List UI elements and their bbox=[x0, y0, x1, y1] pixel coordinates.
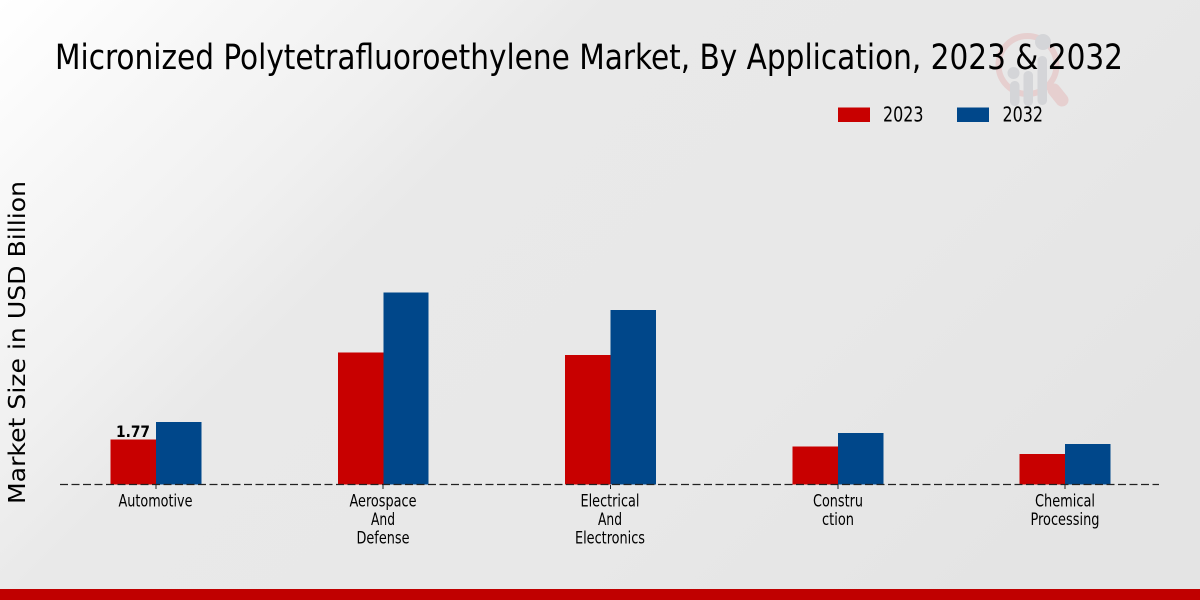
category: Construction: Constru bbox=[813, 492, 863, 510]
legend label: 2023: 2023 bbox=[883, 102, 924, 126]
category: Aerospace And Defense: Defense bbox=[356, 528, 410, 548]
category: Electrical And Electronics: Electronics bbox=[575, 528, 645, 548]
category: Aerospace And Defense: Aerospace bbox=[350, 492, 416, 510]
legend bbox=[838, 102, 1043, 126]
category: Aerospace And Defense: And bbox=[371, 510, 395, 529]
y-axis label: Market Size in USD Billion bbox=[5, 181, 31, 504]
category: Electrical And Electronics bbox=[575, 492, 645, 548]
category: Automotive: Automotive bbox=[118, 492, 192, 510]
category: Construction: ction bbox=[822, 510, 854, 529]
bars: Chemical Processing bbox=[1020, 444, 1110, 484]
bar chart bbox=[60, 292, 1159, 489]
category: Electrical And Electronics: And bbox=[598, 510, 622, 529]
category: Chemical Processing bbox=[1030, 492, 1100, 529]
legend swatch: 2032 bbox=[957, 108, 989, 122]
icon: watermark logo bbox=[998, 34, 1062, 106]
legend swatch: 2023 bbox=[838, 108, 870, 122]
data label: 1.77: 1.77 bbox=[116, 422, 150, 441]
bars: Aerospace And Defense bbox=[338, 292, 428, 484]
category labels bbox=[118, 492, 1100, 548]
category: Construction bbox=[813, 492, 863, 529]
category: Chemical Processing: Processing bbox=[1030, 510, 1100, 529]
category: Aerospace And Defense bbox=[350, 492, 416, 548]
category: Electrical And Electronics: Electrical bbox=[580, 492, 640, 510]
bars: Electrical And Electronics bbox=[565, 310, 656, 484]
footer bar bbox=[0, 589, 1200, 600]
legend label: 2032: 2032 bbox=[1002, 102, 1043, 126]
category: Chemical Processing: Chemical bbox=[1035, 492, 1095, 510]
bars: Construction bbox=[792, 433, 884, 484]
title: Micronized Polytetrafluoroethylene Market, By Application, 2023 & 2032 bbox=[55, 38, 1123, 78]
bars: Automotive bbox=[110, 422, 202, 484]
